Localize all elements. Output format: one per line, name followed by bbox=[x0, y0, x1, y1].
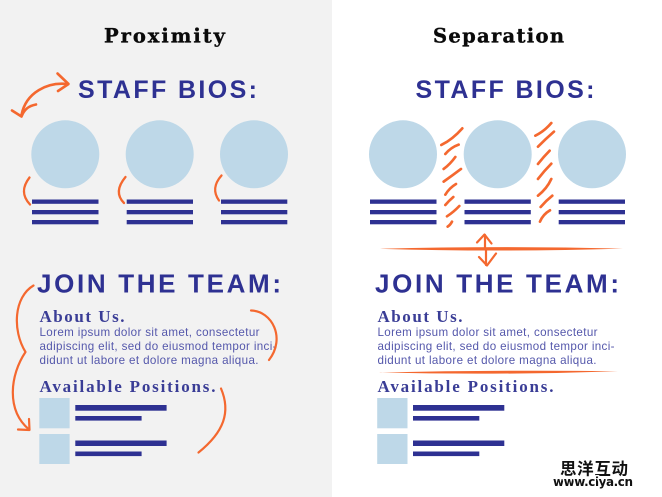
staff bio text lines bbox=[370, 200, 625, 224]
arrow: heading to circles bbox=[12, 74, 68, 116]
panel: proximity layout bbox=[12, 74, 288, 464]
body paragraph: adipiscing elit, sed do eiusmod tempor inci- bbox=[378, 340, 615, 353]
hatch marks: separating columns bbox=[441, 123, 554, 227]
title: Proximity: Proximity bbox=[104, 24, 226, 48]
body paragraph: Lorem ipsum dolor sit amet, consectetur bbox=[40, 326, 260, 339]
subheading: about us: About Us. bbox=[378, 307, 462, 326]
staff portrait circles bbox=[31, 120, 288, 188]
divider: between staff and join sections bbox=[380, 247, 623, 251]
mark: available positions curve bbox=[198, 388, 225, 452]
body paragraph bbox=[40, 326, 277, 367]
subheading: available positions: Available Positions. bbox=[40, 377, 216, 396]
body paragraph: didunt ut labore et dolore magna aliqua. bbox=[378, 354, 596, 367]
watermark: www.ciya.cn bbox=[553, 475, 633, 489]
staff bio text lines bbox=[32, 200, 287, 224]
marks: circle to text proximity bbox=[24, 176, 222, 204]
panel: separation background bbox=[332, 0, 662, 497]
watermark: 思洋互动 bbox=[560, 456, 628, 480]
position thumbnails bbox=[39, 398, 70, 464]
title: Separation: Separation bbox=[433, 24, 564, 48]
mark: about us curve bbox=[251, 310, 277, 360]
body paragraph: didunt ut labore et dolore magna aliqua. bbox=[40, 354, 258, 367]
divider: between about and positions bbox=[379, 371, 618, 374]
panel: proximity background bbox=[0, 0, 332, 497]
panel: separation layout bbox=[369, 76, 626, 464]
subheading: available positions: Available Positions. bbox=[378, 377, 554, 396]
subheading: about us: About Us. bbox=[40, 307, 124, 326]
staff portrait circles bbox=[369, 120, 626, 188]
body paragraph: Lorem ipsum dolor sit amet, consectetur bbox=[378, 326, 598, 339]
heading: staff bios: STAFF BIOS: bbox=[78, 76, 257, 104]
position text lines bbox=[75, 405, 167, 456]
heading: staff bios: STAFF BIOS: bbox=[416, 76, 594, 104]
heading: join the team: JOIN THE TEAM: bbox=[37, 268, 281, 298]
watermark bbox=[553, 456, 633, 489]
heading: join the team: JOIN THE TEAM: bbox=[375, 268, 619, 298]
body paragraph: adipiscing elit, sed do eiusmod tempor inci- bbox=[40, 340, 277, 353]
arrow: join the team brace bbox=[13, 286, 34, 430]
position text lines bbox=[413, 405, 504, 456]
position thumbnails bbox=[377, 398, 408, 464]
double arrow: section gap bbox=[477, 234, 496, 266]
body paragraph bbox=[378, 326, 615, 367]
